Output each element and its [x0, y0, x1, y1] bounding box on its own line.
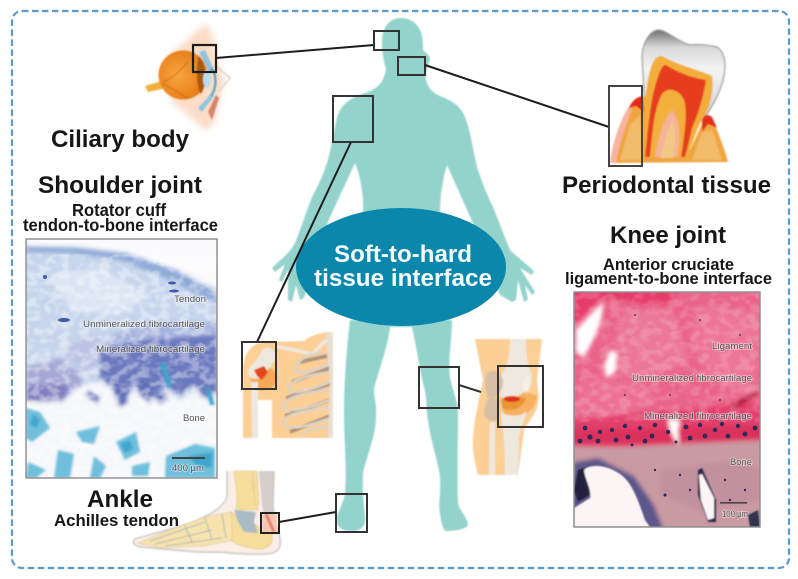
panel: shoulder histology [24, 232, 224, 482]
subheading: anterior cruciate: Anterior cruciate [603, 255, 734, 274]
box: eye inset [193, 45, 216, 72]
box: body ankle [336, 494, 367, 532]
subheading: rotator cuff [23, 200, 218, 235]
texture: tissue mottling [26, 254, 216, 410]
labels: knee histology: Unmineralized fibrocartilage [632, 373, 752, 384]
heading: shoulder joint: Shoulder joint [38, 172, 202, 199]
central ellipse label [296, 208, 506, 326]
line: eye to head [216, 45, 374, 58]
frame: shoulder histology [26, 239, 217, 478]
line: knee to inset [459, 385, 481, 392]
heading: knee joint: Knee joint [610, 222, 726, 249]
heading: ciliary body: Ciliary body [51, 126, 190, 153]
human body silhouette [272, 18, 535, 531]
labels: knee histology: Mineralized fibrocartilage [644, 411, 752, 422]
icon: foot anatomy [133, 471, 280, 554]
box: shoulder inset [242, 342, 276, 389]
subheading: rotator cuff: Rotator cuff [72, 200, 166, 220]
line: ankle to inset [279, 512, 336, 522]
box: body shoulder [333, 96, 373, 142]
subheading: rotator cuff: tendon-to-bone interface [23, 215, 218, 235]
central ellipse label: tissue interface [314, 265, 492, 292]
texture: ligament fibres [574, 292, 760, 422]
icon: tooth [610, 30, 728, 163]
box: body knee [419, 367, 459, 408]
connector lines and callout boxes [193, 31, 642, 533]
box: jaw [398, 57, 425, 75]
labels: shoulder histology [83, 294, 206, 474]
labels: knee histology: 100 μm [722, 509, 748, 520]
icon: shoulder anatomy [243, 332, 333, 438]
subheading: anterior cruciate: ligament-to-bone interface [565, 269, 772, 288]
heading: ankle: Ankle [87, 486, 153, 513]
subheading: achilles tendon: Achilles tendon [54, 511, 179, 530]
icon: knee anatomy [473, 339, 542, 475]
box: head [374, 31, 399, 50]
frame: knee histology [574, 292, 760, 527]
line: jaw to tooth [425, 65, 609, 127]
labels: shoulder histology: Bone [183, 413, 205, 424]
line: shoulder to inset [257, 142, 351, 342]
icon: eye anatomy [145, 24, 230, 130]
box: ankle inset [261, 513, 279, 533]
labels: shoulder histology: Unmineralized fibrocartilage [83, 319, 205, 330]
box: tooth inset [609, 86, 642, 166]
labels: shoulder histology: Tendon [174, 294, 206, 305]
heading: periodontal tissue: Periodontal tissue [562, 172, 771, 199]
subheading: anterior cruciate [565, 255, 772, 288]
labels: knee histology [632, 341, 752, 520]
labels: knee histology: Bone [730, 457, 752, 468]
panel: knee histology [570, 288, 764, 531]
box: knee inset [498, 366, 543, 427]
labels: shoulder histology: 400 μm [172, 463, 204, 474]
labels: shoulder histology: Mineralized fibrocartilage [96, 344, 205, 355]
labels: knee histology: Ligament [712, 341, 752, 352]
central ellipse label: Soft-to-hard [334, 241, 472, 268]
